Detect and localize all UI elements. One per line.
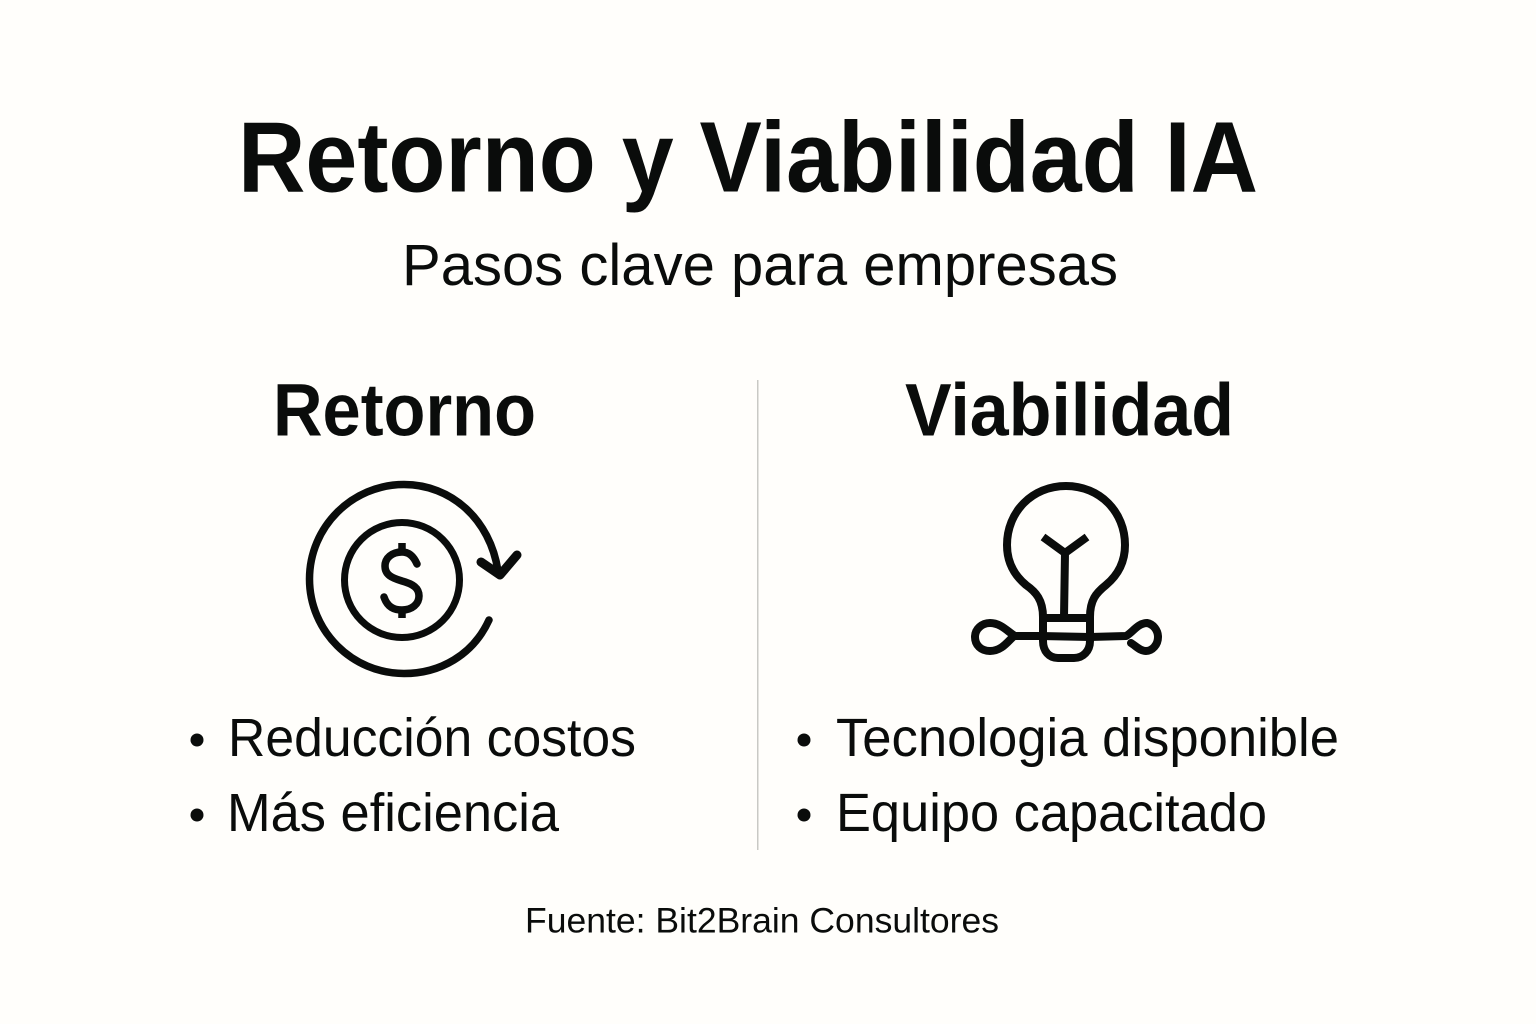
icon: light bulb	[975, 486, 1158, 658]
bullet item: equipo capacitado: Equipo capacitado	[836, 783, 1267, 843]
bullet item: reducción costos: Reducción costos	[228, 708, 636, 768]
heading: retorno: Retorno	[273, 368, 536, 452]
bullet item: tecnología disponible: Tecnologia disponible	[836, 708, 1339, 768]
bullet item: más eficiencia: Más eficiencia	[227, 783, 560, 843]
heading: viabilidad: Viabilidad	[905, 368, 1234, 452]
title: Retorno y Viabilidad IA	[238, 102, 1258, 214]
list: viabilidad requirements	[798, 708, 1339, 843]
panel: retorno	[190, 368, 636, 843]
source note: Fuente: Bit2Brain Consultores	[525, 902, 999, 940]
icon: circular arrow with dollar coin	[310, 484, 517, 674]
subtitle: Pasos clave para empresas	[402, 233, 1118, 298]
list: retorno benefits	[190, 708, 636, 843]
panel: viabilidad	[798, 368, 1339, 843]
